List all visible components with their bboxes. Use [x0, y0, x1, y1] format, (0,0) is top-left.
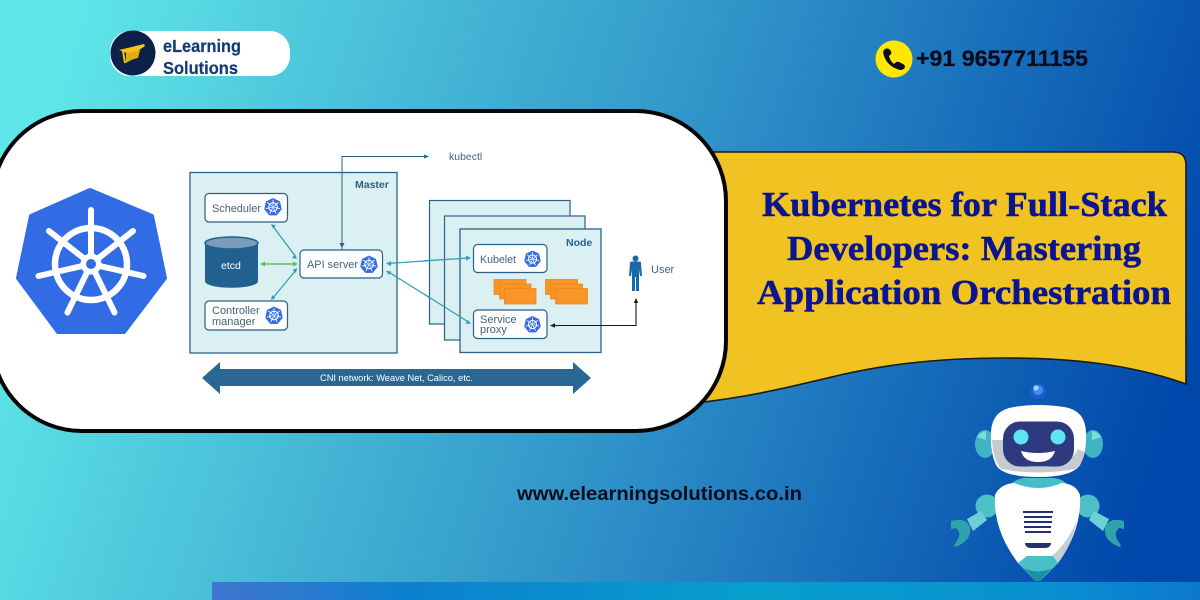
component: Kubelet [474, 244, 547, 272]
robot belly gem [1018, 556, 1058, 581]
robot neck and collar [1011, 478, 1067, 492]
component: Controller manager: Controller [212, 305, 260, 317]
User label: User [651, 264, 675, 276]
component: etcd database [205, 237, 258, 288]
component: Scheduler: Scheduler [212, 203, 261, 215]
logo: eLearning Solutions [110, 30, 290, 78]
robot antenna [1030, 383, 1046, 399]
pods: orange group two [546, 280, 588, 304]
component: Service proxy [474, 310, 547, 338]
component: Service proxy: Service [480, 314, 517, 326]
title banner [695, 152, 1186, 403]
component: Service proxy: proxy [480, 324, 507, 336]
component: Controller manager [205, 301, 288, 330]
logo icon: graduation cap [110, 30, 156, 76]
website url: www.elearningsolutions.co.in [516, 484, 802, 505]
robot body shade [1052, 520, 1077, 563]
arrows over worker nodes [424, 256, 471, 324]
component: Controller manager: manager [212, 316, 256, 328]
logo text: eLearning [163, 36, 241, 56]
pods: orange group one [494, 280, 536, 304]
robot body [995, 483, 1080, 581]
kubectl connector: kubectl [449, 151, 482, 163]
kubernetes architecture diagram [190, 151, 675, 394]
component: API server [300, 250, 382, 278]
phone contact [876, 40, 1088, 78]
phone number: +91 9657711155 [916, 46, 1088, 71]
kubectl connector [340, 151, 482, 273]
user connector arrow [550, 298, 638, 328]
icon: Kubernetes logo [18, 190, 165, 332]
arrows to API server [260, 224, 471, 324]
component: etcd database: etcd [221, 260, 241, 272]
arrow: CNI network: CNI network: Weave Net, Calico, etc. [320, 373, 473, 384]
robot left arm [951, 494, 998, 547]
logo text: Solutions [163, 58, 238, 78]
bottom image strip [212, 582, 1200, 600]
icon: phone [876, 40, 912, 78]
robot mascot [951, 383, 1124, 581]
panel: Node: Node [566, 237, 592, 249]
banner title: Application Orchestration [757, 273, 1171, 312]
logo text [163, 36, 241, 78]
robot head [991, 405, 1086, 477]
component: API server: API server [307, 259, 358, 271]
banner title: Developers: Mastering [787, 229, 1142, 268]
robot ears [975, 430, 1103, 458]
banner title: Kubernetes for Full-Stack [762, 185, 1168, 224]
robot right arm [1076, 494, 1124, 547]
white pill panel [0, 111, 726, 431]
icon: user [629, 256, 642, 291]
component: Kubelet: Kubelet [480, 254, 516, 266]
banner title [757, 185, 1171, 312]
robot chest vent [1023, 511, 1053, 548]
component: Scheduler [205, 194, 288, 222]
panel: Node [460, 229, 601, 352]
panel: back worker nodes [430, 200, 585, 340]
arrow: CNI network [202, 362, 591, 394]
panel: Master [190, 172, 397, 353]
panel: Master: Master [355, 179, 389, 191]
